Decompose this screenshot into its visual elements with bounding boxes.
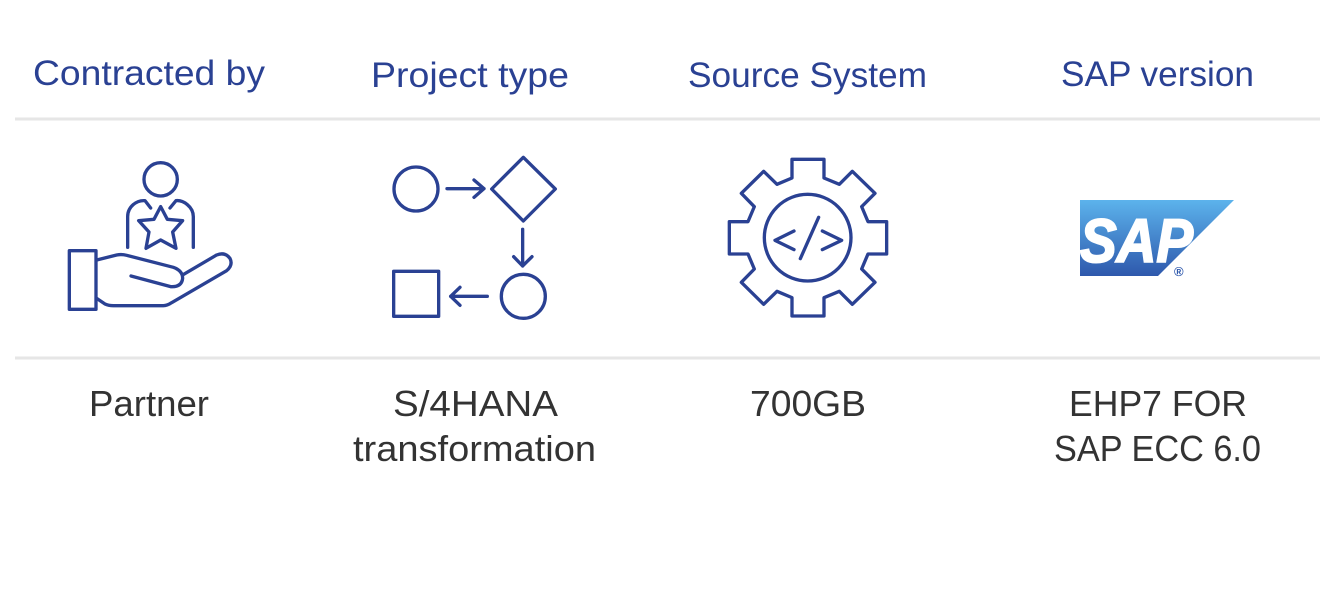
value: EHP7 FOR SAP ECC 6.0: EHP7 FOR xyxy=(1069,383,1247,424)
value: Partner: Partner xyxy=(89,383,209,424)
value: 700GB: 700GB xyxy=(750,383,866,424)
heading: SAP version: SAP version xyxy=(1061,55,1254,94)
value: S/4HANA transformation xyxy=(353,383,596,469)
heading: Contracted by: Contracted by xyxy=(33,54,266,93)
heading: Source System: Source System xyxy=(688,56,927,95)
icon: process flow xyxy=(394,157,555,318)
value: EHP7 FOR SAP ECC 6.0 xyxy=(1054,383,1261,469)
value: S/4HANA transformation: transformation xyxy=(353,428,596,469)
value: S/4HANA transformation: S/4HANA xyxy=(393,383,558,424)
icon: hand holding person with star xyxy=(69,163,231,309)
icon: SAP logo: SAP xyxy=(1080,207,1193,275)
heading: Project type: Project type xyxy=(371,56,569,95)
value: EHP7 FOR SAP ECC 6.0: SAP ECC 6.0 xyxy=(1054,428,1261,469)
icon: SAP logo: ® xyxy=(1174,264,1184,279)
icon: gear with code xyxy=(729,159,887,316)
